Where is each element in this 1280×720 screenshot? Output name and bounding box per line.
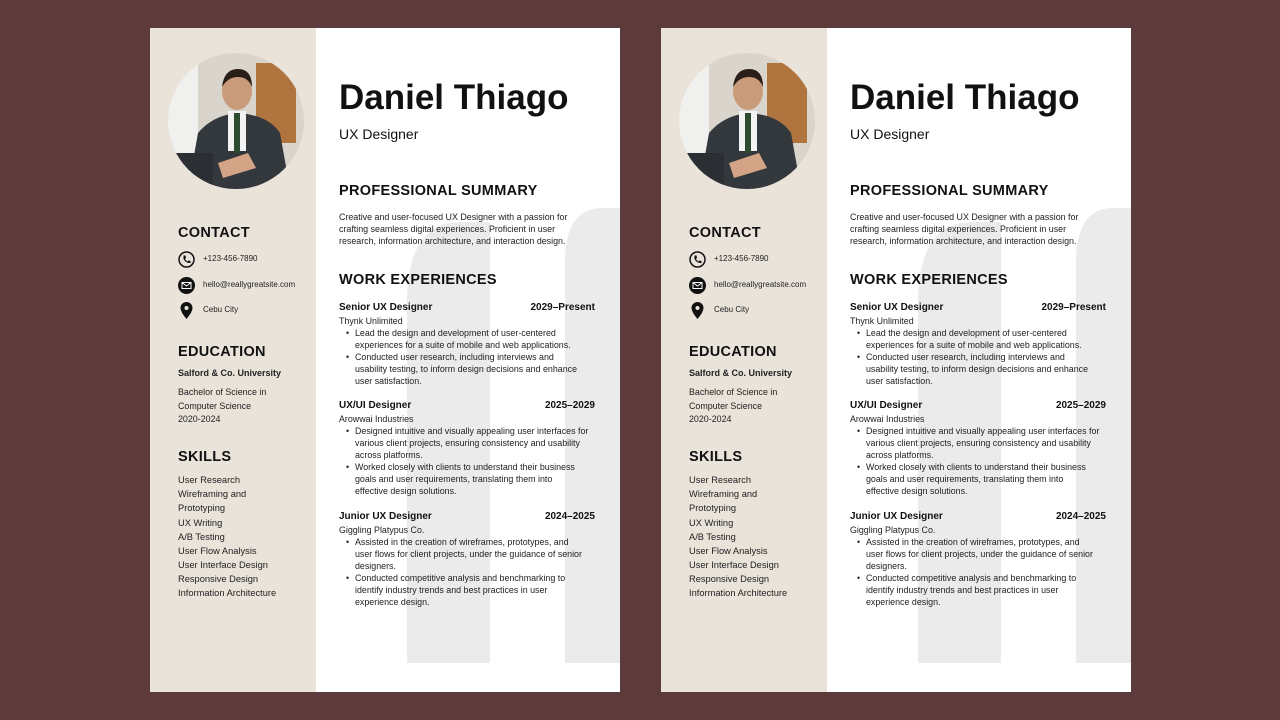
skills list: User Flow Analysis — [178, 546, 257, 556]
education details: Salford & Co. University — [178, 368, 281, 378]
job 2: across platforms. — [866, 450, 934, 460]
job 1: 2029–Present — [1042, 302, 1106, 313]
job 3: experience design. — [355, 597, 430, 607]
heading: contact: CONTACT — [689, 225, 761, 241]
job 2: Worked closely with clients to understand their business — [355, 462, 575, 472]
education details — [689, 368, 792, 424]
contact list: Cebu City — [203, 305, 238, 314]
job 1: Thynk Unlimited — [339, 316, 403, 326]
heading: professional summary: PROFESSIONAL SUMMARY — [850, 183, 1049, 199]
education details: Bachelor of Science in — [689, 387, 777, 397]
skills list: Wireframing and — [178, 489, 246, 499]
summary text: research, information architecture, and interaction design. — [339, 236, 565, 246]
job 2: Worked closely with clients to understand their business — [866, 462, 1086, 472]
sidebar — [661, 28, 827, 692]
heading: professional summary: PROFESSIONAL SUMMARY — [339, 183, 538, 199]
education details: Salford & Co. University — [689, 368, 792, 378]
job 3: 2024–2025 — [1056, 511, 1106, 522]
icon: location — [692, 302, 704, 319]
icon: email — [689, 277, 706, 294]
skills list: User Research — [689, 475, 751, 485]
job 3: identify industry trends and best practices in user — [866, 585, 1058, 595]
job 2: goals and user requirements, translating them into — [355, 474, 552, 484]
education details: 2020-2024 — [178, 414, 220, 424]
job 3 — [850, 511, 1106, 607]
job 3: Junior UX Designer — [339, 511, 432, 522]
job 2: Arowwai Industries — [339, 414, 413, 424]
skills list: UX Writing — [178, 518, 222, 528]
heading: work experiences: WORK EXPERIENCES — [339, 272, 497, 288]
name: Daniel Thiago — [339, 78, 568, 117]
icon: phone — [689, 251, 706, 268]
job title: UX Designer — [339, 126, 418, 142]
education details: Computer Science — [178, 400, 251, 410]
job 2: various client projects, ensuring consistency and usability — [355, 438, 580, 448]
heading: skills: SKILLS — [178, 449, 231, 465]
icon: location — [180, 302, 192, 319]
job 2: various client projects, ensuring consistency and usability — [866, 438, 1091, 448]
job 3: experience design. — [866, 597, 941, 607]
education details: Computer Science — [689, 400, 762, 410]
contact list: hello@reallygreatsite.com — [203, 280, 295, 289]
icon: phone — [178, 251, 195, 268]
job 1: Senior UX Designer — [339, 302, 432, 313]
job 2: Designed intuitive and visually appealing user interfaces for — [866, 426, 1099, 436]
summary text — [850, 212, 1078, 246]
job 2 — [850, 400, 1106, 496]
contact list: +123-456-7890 — [203, 254, 258, 263]
skills list: Responsive Design — [178, 574, 258, 584]
skills list: A/B Testing — [178, 532, 225, 542]
skills list: Prototyping — [689, 503, 736, 513]
job 2: effective design solutions. — [866, 486, 967, 496]
photo — [168, 53, 304, 189]
skills list: Prototyping — [178, 503, 225, 513]
job 2: goals and user requirements, translating them into — [866, 474, 1063, 484]
contact list — [178, 251, 295, 319]
heading: education: EDUCATION — [178, 344, 266, 360]
contact list: hello@reallygreatsite.com — [714, 280, 806, 289]
job 1: Lead the design and development of user-centered — [866, 328, 1067, 338]
job 2 — [339, 400, 595, 496]
job 1 — [339, 302, 595, 386]
summary text — [339, 212, 568, 246]
skills list: Information Architecture — [178, 588, 276, 598]
summary text: crafting seamless digital experiences. Proficient in user — [850, 224, 1066, 234]
skills list: User Research — [178, 475, 240, 485]
job 2: Arowwai Industries — [850, 414, 924, 424]
summary text: Creative and user-focused UX Designer with a passion for — [339, 212, 567, 222]
job 3: user flows for client projects, under the guidance of senior — [355, 549, 582, 559]
heading: skills: SKILLS — [689, 449, 742, 465]
job 2: effective design solutions. — [355, 486, 456, 496]
skills list: UX Writing — [689, 518, 733, 528]
education details: Bachelor of Science in — [178, 387, 266, 397]
skills list: Information Architecture — [689, 588, 787, 598]
job 3: Giggling Platypus Co. — [339, 525, 424, 535]
job 3: Conducted competitive analysis and benchmarking to — [355, 573, 565, 583]
heading: contact: CONTACT — [178, 225, 250, 241]
job 1: Conducted user research, including interviews and — [355, 352, 554, 362]
job 1: Thynk Unlimited — [850, 316, 914, 326]
skills list — [178, 475, 276, 598]
job 3: user flows for client projects, under the guidance of senior — [866, 549, 1093, 559]
summary text: Creative and user-focused UX Designer with a passion for — [850, 212, 1078, 222]
job 2: UX/UI Designer — [339, 400, 411, 411]
heading: education: EDUCATION — [689, 344, 777, 360]
job 3: Giggling Platypus Co. — [850, 525, 935, 535]
skills list: User Interface Design — [178, 560, 268, 570]
job 2: 2025–2029 — [545, 400, 595, 411]
job 3 — [339, 511, 595, 607]
job 3: Conducted competitive analysis and benchmarking to — [866, 573, 1076, 583]
sidebar — [150, 28, 316, 692]
job 3: Junior UX Designer — [850, 511, 943, 522]
job 1: usability testing, to inform design decisions and enhance — [355, 364, 577, 374]
job 1: experiences for a suite of mobile and web applications. — [866, 340, 1082, 350]
job 3: designers. — [355, 561, 396, 571]
job title: UX Designer — [850, 126, 929, 142]
resume: right copy — [661, 28, 1131, 692]
summary text: research, information architecture, and interaction design. — [850, 236, 1076, 246]
education details: 2020-2024 — [689, 414, 731, 424]
photo — [679, 53, 815, 189]
job 1: Senior UX Designer — [850, 302, 943, 313]
job 3: Assisted in the creation of wireframes, prototypes, and — [866, 537, 1080, 547]
skills list: Responsive Design — [689, 574, 769, 584]
contact list — [689, 251, 806, 319]
skills list: User Flow Analysis — [689, 546, 768, 556]
job 1: 2029–Present — [530, 302, 595, 313]
job 1: Lead the design and development of user-centered — [355, 328, 556, 338]
education details — [178, 368, 281, 424]
job 1: Conducted user research, including interviews and — [866, 352, 1065, 362]
job 1: experiences for a suite of mobile and web applications. — [355, 340, 571, 350]
job 1 — [850, 302, 1106, 386]
summary text: crafting seamless digital experiences. Proficient in user — [339, 224, 555, 234]
contact list: +123-456-7890 — [714, 254, 768, 263]
job 3: designers. — [866, 561, 907, 571]
job 2: across platforms. — [355, 450, 423, 460]
job 3: identify industry trends and best practices in user — [355, 585, 547, 595]
skills list — [689, 475, 787, 598]
job 3: 2024–2025 — [545, 511, 595, 522]
job 1: usability testing, to inform design decisions and enhance — [866, 364, 1088, 374]
job 3: Assisted in the creation of wireframes, prototypes, and — [355, 537, 569, 547]
job 2: 2025–2029 — [1056, 400, 1106, 411]
heading: work experiences: WORK EXPERIENCES — [850, 272, 1008, 288]
name: Daniel Thiago — [850, 78, 1079, 117]
skills list: User Interface Design — [689, 560, 779, 570]
resume: left copy — [150, 28, 620, 692]
job 2: Designed intuitive and visually appealing user interfaces for — [355, 426, 588, 436]
skills list: Wireframing and — [689, 489, 757, 499]
contact list: Cebu City — [714, 305, 749, 314]
skills list: A/B Testing — [689, 532, 736, 542]
job 1: user satisfaction. — [355, 376, 422, 386]
background brace shape — [918, 208, 1131, 663]
job 2: UX/UI Designer — [850, 400, 922, 411]
job 1: user satisfaction. — [866, 376, 933, 386]
icon: email — [178, 277, 195, 294]
background brace shape — [407, 208, 620, 663]
